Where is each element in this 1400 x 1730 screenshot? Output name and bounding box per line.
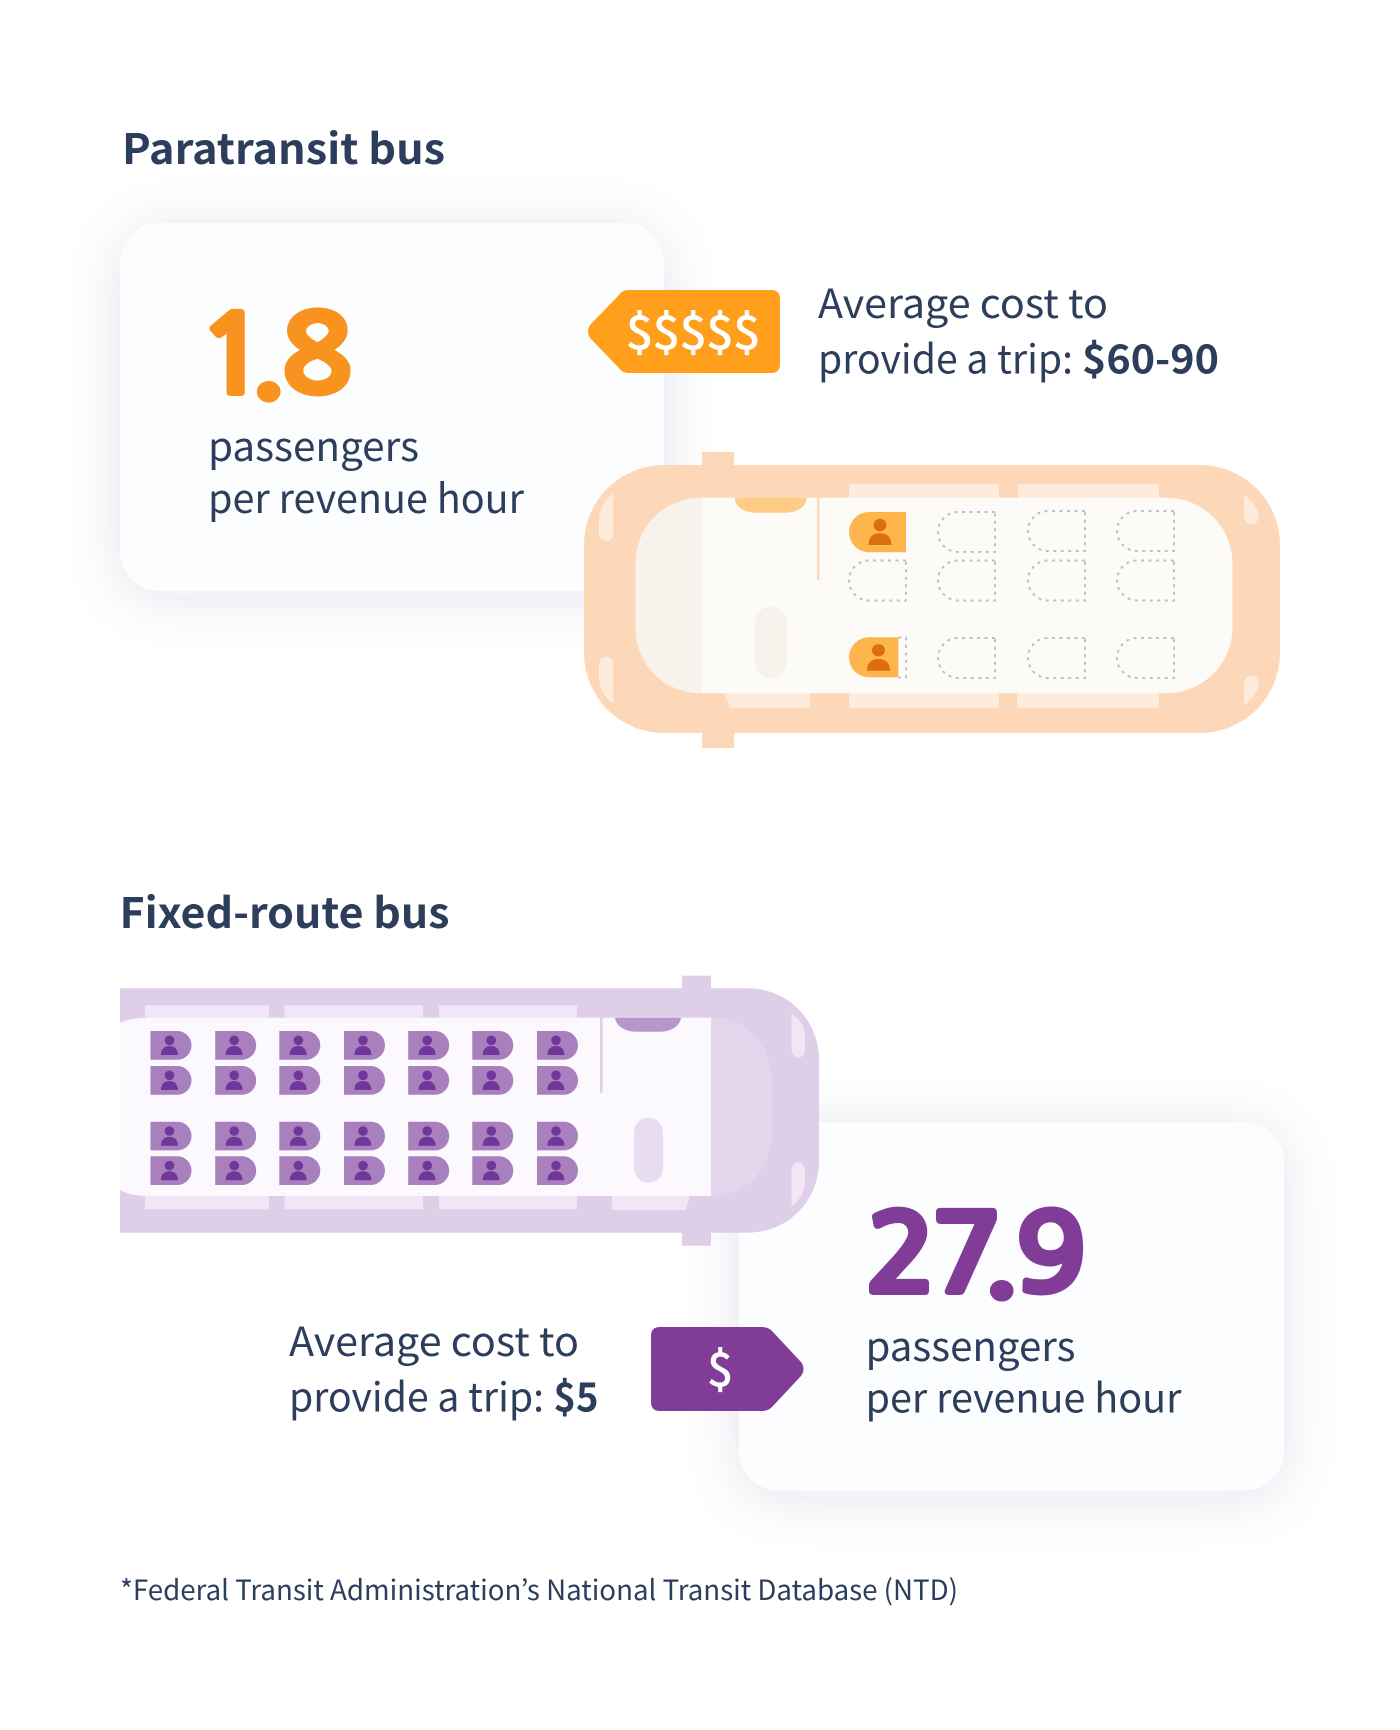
windshield xyxy=(636,498,702,693)
text: paratransit average cost: Average cost to xyxy=(818,272,1108,330)
windshield xyxy=(711,1018,772,1196)
text: paratransit average cost xyxy=(818,272,1219,386)
icon: price tag five dollars: $$$$$ xyxy=(626,297,760,363)
mirrors xyxy=(682,976,711,1246)
side windows xyxy=(723,484,1159,708)
illustration: paratransit bus top view xyxy=(584,452,1280,748)
footnote: *Federal Transit Administration’s National Transit Database (NTD) xyxy=(120,1569,958,1609)
text: paratransit average cost: provide a trip: xyxy=(818,328,1073,386)
bus body xyxy=(120,988,819,1233)
big number: 27.9: 27.9 xyxy=(865,1202,1087,1308)
label: passengers per revenue hour xyxy=(208,415,524,525)
occupied seats xyxy=(150,1031,578,1185)
side windows xyxy=(145,1005,690,1210)
panel: fixed-route stat card xyxy=(739,1122,1284,1490)
text: paratransit average cost: $60-90 xyxy=(1082,328,1219,386)
occupied seat lower xyxy=(849,637,898,677)
label: passengers per revenue hour: passengers xyxy=(866,1315,1076,1373)
icon: price tag one dollar xyxy=(651,1327,804,1411)
text: fixed-route average cost: provide a trip: xyxy=(289,1366,544,1424)
text: fixed-route average cost: Average cost to xyxy=(289,1310,579,1368)
text: fixed-route average cost xyxy=(289,1310,598,1424)
bus body xyxy=(584,465,1280,733)
illustration: fixed-route bus top view xyxy=(120,976,819,1246)
steering wheel xyxy=(615,1018,681,1032)
mirrors xyxy=(702,452,734,748)
label: passengers per revenue hour: per revenue hour xyxy=(208,467,524,525)
door step xyxy=(634,1118,663,1183)
light marks xyxy=(599,494,1258,705)
text: fixed-route average cost: $5 xyxy=(554,1366,598,1424)
interior floor xyxy=(120,1018,772,1196)
label: passengers per revenue hour: per revenue hour xyxy=(866,1366,1182,1424)
icon: price tag five dollars xyxy=(588,290,780,373)
label: passengers per revenue hour: passengers xyxy=(208,415,419,473)
door step xyxy=(755,607,786,678)
interior floor xyxy=(636,498,1232,693)
light marks xyxy=(792,1014,805,1206)
steering wheel xyxy=(735,498,807,513)
empty seats xyxy=(849,511,1174,678)
big number: 1.8: 1.8 xyxy=(197,303,353,409)
divider xyxy=(600,1018,602,1093)
heading: Paratransit bus: Paratransit bus xyxy=(122,116,445,177)
label: passengers per revenue hour xyxy=(866,1315,1182,1424)
divider xyxy=(817,498,820,580)
icon: price tag one dollar: $ xyxy=(707,1334,733,1400)
occupied seat upper xyxy=(849,512,906,552)
panel: paratransit stat card xyxy=(120,223,664,591)
heading: Fixed-route bus: Fixed-route bus xyxy=(120,880,450,941)
